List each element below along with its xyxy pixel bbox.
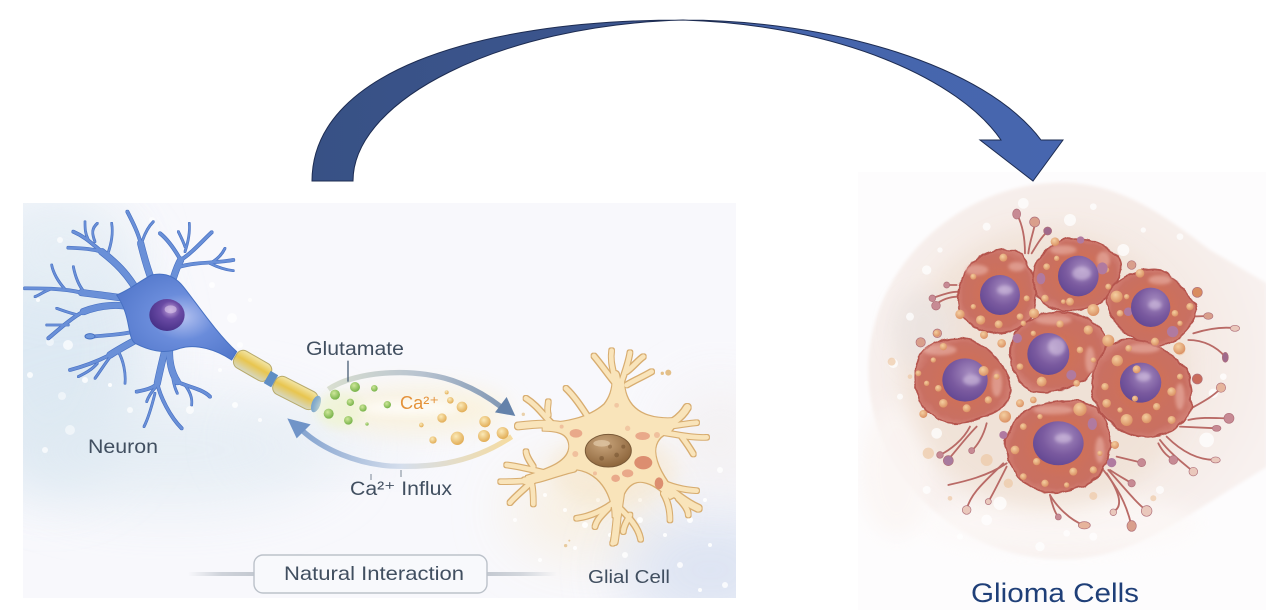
nucleus bbox=[149, 299, 185, 331]
dendrites bbox=[25, 212, 233, 428]
cell bodies bbox=[915, 238, 1196, 493]
soma bbox=[117, 274, 237, 360]
nucleus highlights bbox=[963, 267, 1162, 443]
neuron bbox=[25, 212, 323, 428]
glial cell bbox=[501, 351, 707, 547]
label: calcium: Ca²⁺ bbox=[400, 393, 439, 413]
panel: natural interaction bbox=[23, 203, 736, 598]
connector: natural interaction lines bbox=[188, 572, 557, 576]
cell cytoplasm tint bbox=[1098, 262, 1099, 265]
glial shadow bbox=[550, 433, 677, 507]
calcium molecules bbox=[419, 390, 509, 445]
glial arms bbox=[501, 351, 707, 543]
cell processes bbox=[932, 215, 1235, 527]
nucleus adjacent bumps bbox=[979, 365, 1141, 402]
sparkles bbox=[27, 217, 728, 592]
label: glioma cells: Glioma Cells bbox=[971, 578, 1139, 608]
glial nucleus bbox=[585, 434, 631, 467]
glutamate molecules bbox=[324, 382, 391, 426]
arrow: calcium influx back to neuron bbox=[287, 418, 512, 466]
label: calcium influx: Ca²⁺ Influx bbox=[350, 479, 453, 500]
nuclei bbox=[942, 256, 1170, 465]
label box: natural interaction: Natural Interaction bbox=[284, 563, 464, 585]
label: glial cell: Glial Cell bbox=[588, 566, 670, 587]
glial organelles bbox=[560, 403, 663, 489]
leader ticks: calcium influx bbox=[371, 470, 401, 480]
curved arrow: neuron to glioma bbox=[312, 20, 1063, 181]
signalling arrows and molecules bbox=[287, 361, 515, 466]
bubble background bbox=[868, 183, 1267, 559]
cell surface highlights bbox=[923, 245, 1185, 463]
signal wedge glow bbox=[316, 386, 510, 434]
sparkles bbox=[889, 198, 1227, 551]
label: glutamate: Glutamate bbox=[306, 339, 404, 360]
panel: glioma cells bbox=[858, 172, 1267, 610]
axon with myelin bbox=[231, 348, 323, 414]
glial stray droplets bbox=[522, 370, 671, 547]
label box: natural interaction bbox=[254, 555, 487, 593]
cell purple vesicles bbox=[999, 236, 1178, 467]
leader line: glutamate bbox=[346, 361, 350, 382]
arrow: glutamate to glial cell bbox=[328, 373, 515, 416]
process tips bbox=[916, 209, 1240, 531]
cell bumps bbox=[915, 237, 1194, 488]
label: neuron: Neuron bbox=[88, 437, 158, 458]
